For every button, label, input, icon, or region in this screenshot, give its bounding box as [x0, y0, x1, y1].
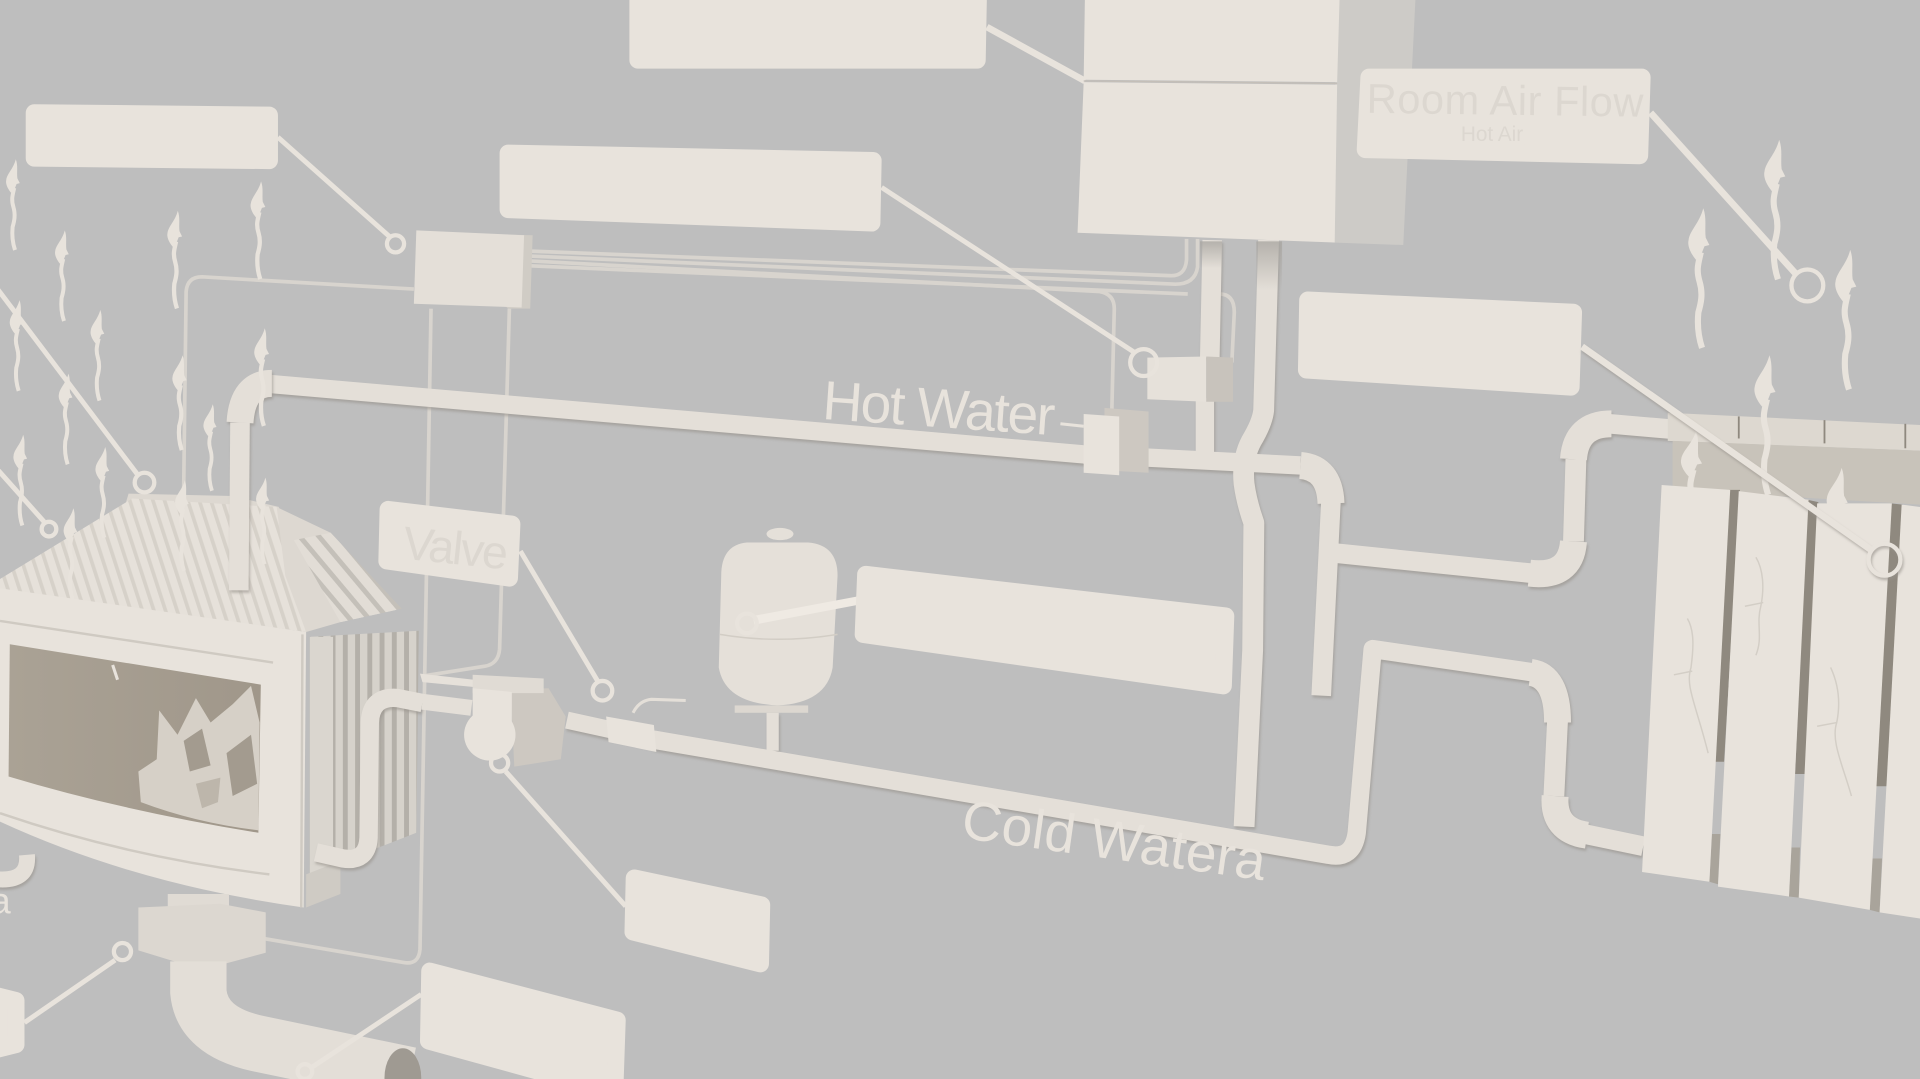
fireplace arrows over hood	[13, 328, 269, 599]
fireplace window	[9, 644, 261, 833]
control box	[414, 230, 533, 309]
callout: upper middle	[508, 153, 873, 223]
label: cold water: Cold Watera	[958, 788, 1270, 892]
pipe elbows	[0, 424, 1611, 880]
fireplace front frame	[0, 588, 306, 907]
flow switches on hot water line	[1060, 356, 1233, 475]
radiator	[1642, 413, 1920, 918]
pipework: hot and cold water	[0, 240, 1680, 880]
ball valve	[606, 699, 686, 752]
radiator top header	[1668, 413, 1920, 451]
callout: left	[34, 113, 269, 161]
flames	[113, 665, 260, 830]
fireplace side fins	[306, 631, 419, 907]
expansion tank	[719, 528, 857, 713]
riser into hood	[239, 383, 272, 590]
fireplace hood	[0, 498, 306, 632]
hot pipe over side	[316, 698, 422, 859]
shade under boiler	[1200, 241, 1282, 290]
callout: room air flow	[1365, 75, 1645, 156]
control wires	[184, 239, 1234, 963]
hood side vents	[285, 533, 402, 622]
callout: pump	[633, 878, 762, 964]
leader line over flue	[311, 994, 421, 1068]
marker rings	[42, 235, 1900, 1079]
label: hot water: Hot Water	[821, 369, 1057, 447]
callout: flue	[429, 971, 617, 1079]
radiator leader line	[1582, 347, 1871, 550]
callout: room air flow: Room Air Flow	[1366, 75, 1645, 126]
callout: lower left	[0, 994, 16, 1051]
callout: valve: Valve	[401, 517, 511, 579]
boiler	[1078, 0, 1416, 245]
callout: room air flow: Hot Air	[1461, 123, 1523, 146]
callout: top	[638, 0, 978, 60]
hood top band and flue collar	[122, 494, 279, 521]
fireplace	[0, 383, 422, 907]
embossed arrows on radiator	[1674, 557, 1851, 796]
callout: expansion tank	[863, 574, 1226, 686]
rising hot air arrows	[6, 140, 1856, 600]
radiator dark gaps	[1709, 490, 1903, 912]
callout: radiator	[1307, 300, 1573, 387]
base box and flue	[138, 894, 421, 1079]
circulator pump	[420, 674, 566, 767]
frame grooves	[0, 621, 302, 907]
